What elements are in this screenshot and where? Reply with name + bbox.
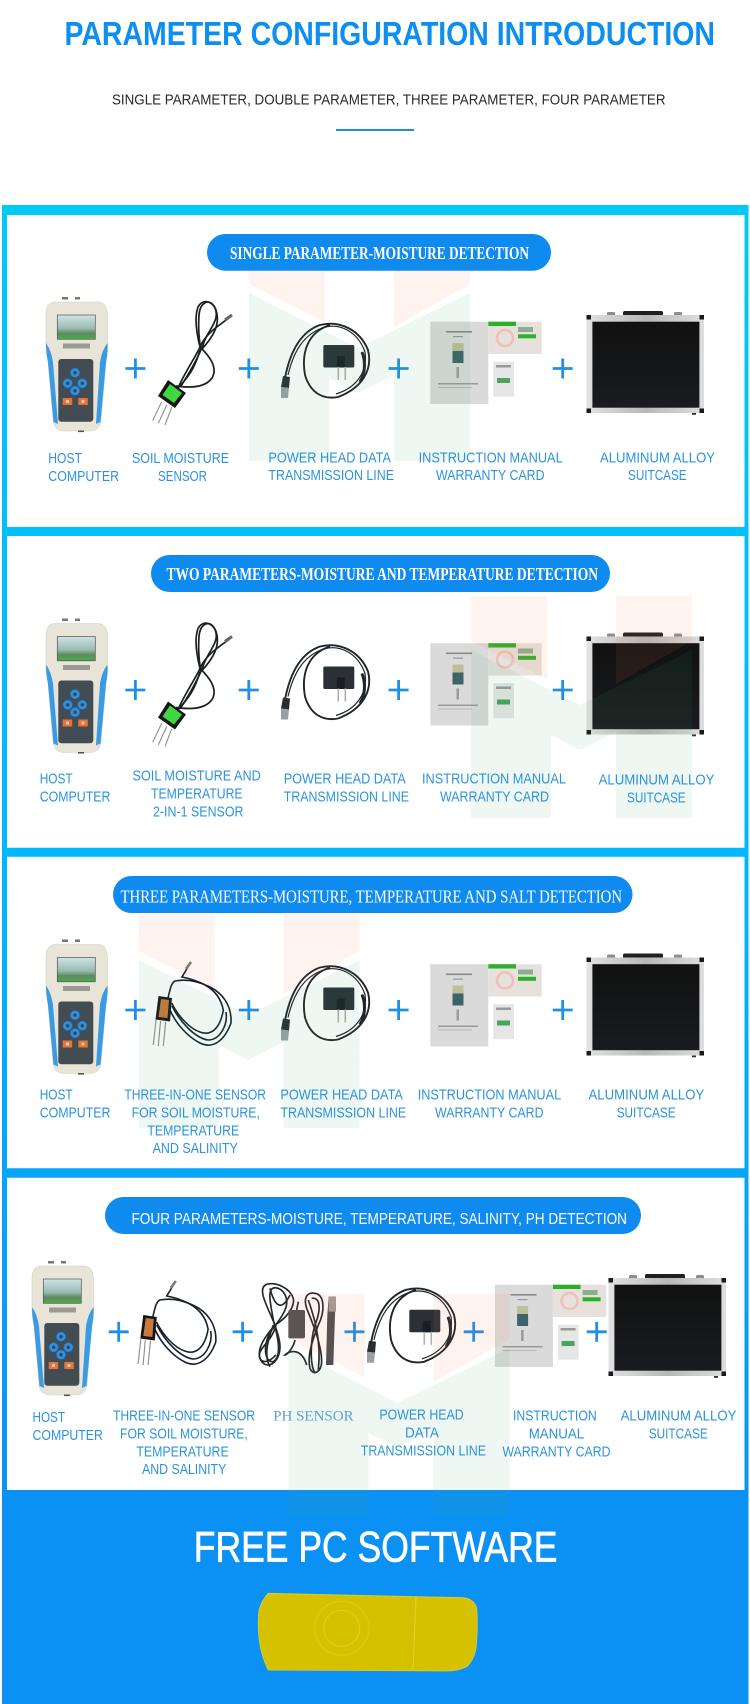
label: host computer xyxy=(32,1409,103,1444)
label: host computer: HOST xyxy=(40,770,73,787)
label: manual and warranty: INSTRUCTION MANUAL xyxy=(418,1086,561,1103)
host computer xyxy=(46,297,108,432)
power head data line xyxy=(281,645,369,720)
label: manual and warranty: WARRANTY CARD xyxy=(440,788,549,805)
panel: two parameters xyxy=(40,555,714,820)
watermark logo xyxy=(471,596,692,818)
label: suitcase xyxy=(599,771,714,806)
label: manual and warranty: INSTRUCTION xyxy=(513,1407,597,1424)
plus sign xyxy=(239,358,259,378)
label: host computer: HOST xyxy=(32,1409,65,1426)
label: host computer: COMPUTER xyxy=(32,1427,103,1444)
label: suitcase xyxy=(600,450,715,484)
label: three-in-one sensor xyxy=(113,1407,255,1478)
manual and warranty card xyxy=(430,322,542,404)
footer heading: FREE PC SOFTWARE xyxy=(194,1524,557,1572)
panel: three parameters xyxy=(40,876,704,1157)
label: three-in-one sensor: FOR SOIL MOISTURE, xyxy=(120,1425,248,1442)
panel: single parameter xyxy=(46,234,715,485)
label: suitcase: ALUMINUM ALLOY xyxy=(599,771,714,788)
icon: yellow USB drive xyxy=(258,1593,477,1671)
label: soil moisture sensor: SOIL MOISTURE xyxy=(132,450,229,467)
label: three-in-one sensor: FOR SOIL MOISTURE, xyxy=(132,1104,260,1121)
label: manual and warranty xyxy=(502,1407,611,1460)
label: three-in-one sensor: AND SALINITY xyxy=(142,1461,226,1478)
three-in-one sensor xyxy=(138,1281,216,1365)
aluminum suitcase xyxy=(586,954,704,1057)
label: three-in-one sensor xyxy=(124,1086,266,1157)
power head data line xyxy=(281,324,369,398)
label: suitcase: ALUMINUM ALLOY xyxy=(621,1407,736,1424)
label: suitcase: SUITCASE xyxy=(628,467,687,484)
power head data line xyxy=(281,966,369,1040)
label: host computer: COMPUTER xyxy=(40,788,111,805)
label: manual and warranty xyxy=(418,1086,561,1121)
heading pill: THREE PARAMETERS-MOISTURE, TEMPERATURE AND SALT DETECTION xyxy=(120,887,622,907)
host computer xyxy=(32,1261,94,1396)
label: three-in-one sensor: TEMPERATURE xyxy=(147,1122,239,1139)
manual and warranty card xyxy=(495,1285,606,1367)
heading pill xyxy=(113,876,632,913)
label: power head data line: TRANSMISSION LINE xyxy=(284,788,409,805)
label: power head data line xyxy=(284,770,409,805)
label: power head data line xyxy=(280,1086,406,1121)
plus sign xyxy=(553,680,573,700)
label: power head data line xyxy=(361,1407,486,1459)
plus sign xyxy=(389,358,409,378)
label: suitcase: SUITCASE xyxy=(617,1104,676,1121)
aluminum suitcase xyxy=(608,1274,726,1378)
plus sign xyxy=(553,358,573,378)
label: power head data line: TRANSMISSION LINE xyxy=(361,1442,486,1459)
label: 2-in-1 sensor: SOIL MOISTURE AND xyxy=(132,767,261,784)
label: soil moisture sensor: SENSOR xyxy=(158,468,207,485)
plus sign xyxy=(125,1000,145,1020)
label: pH sensor: PH SENSOR xyxy=(273,1408,354,1424)
label: manual and warranty xyxy=(419,450,563,484)
label: manual and warranty xyxy=(422,770,566,805)
host computer xyxy=(46,618,108,754)
label: three-in-one sensor: TEMPERATURE xyxy=(136,1443,229,1460)
label: 2-in-1 sensor: TEMPERATURE xyxy=(151,785,243,802)
plus sign xyxy=(464,1322,484,1342)
pH sensor xyxy=(259,1284,336,1373)
watermark logo xyxy=(288,1294,510,1516)
subtitle: SINGLE PARAMETER, DOUBLE PARAMETER, THREE PARAMETER, FOUR PARAMETER xyxy=(112,92,666,109)
label: host computer: HOST xyxy=(40,1086,73,1103)
heading pill xyxy=(151,555,610,592)
heading pill: SINGLE PARAMETER-MOISTURE DETECTION xyxy=(230,243,529,263)
aluminum suitcase xyxy=(586,311,704,415)
label: three-in-one sensor: THREE-IN-ONE SENSOR xyxy=(124,1086,266,1103)
plus sign xyxy=(389,1000,409,1020)
plus sign xyxy=(233,1322,253,1342)
host computer xyxy=(46,940,108,1075)
three-in-one sensor xyxy=(153,962,231,1046)
label: host computer: HOST xyxy=(48,450,82,467)
label: manual and warranty: WARRANTY CARD xyxy=(435,1104,544,1121)
label: host computer: COMPUTER xyxy=(48,468,119,485)
watermark logo xyxy=(249,239,470,461)
label: host computer xyxy=(40,1086,111,1121)
label: host computer: COMPUTER xyxy=(40,1104,111,1121)
label: soil moisture sensor xyxy=(132,450,229,485)
label: host computer xyxy=(40,770,111,805)
label: power head data line: POWER HEAD DATA xyxy=(280,1086,403,1103)
label: manual and warranty: INSTRUCTION MANUAL xyxy=(422,770,566,787)
label: power head data line: POWER HEAD DATA xyxy=(268,450,391,466)
plus sign xyxy=(109,1322,129,1342)
label: three-in-one sensor: AND SALINITY xyxy=(153,1140,238,1157)
plus sign xyxy=(553,1000,573,1020)
heading pill xyxy=(207,234,551,271)
heading pill: TWO PARAMETERS-MOISTURE AND TEMPERATURE DETECTION xyxy=(166,564,598,584)
label: manual and warranty: WARRANTY CARD xyxy=(436,467,545,484)
panel: four parameters xyxy=(32,1197,736,1516)
label: suitcase: SUITCASE xyxy=(649,1425,708,1442)
label: 2-in-1 sensor xyxy=(132,767,261,820)
heading pill: FOUR PARAMETERS-MOISTURE, TEMPERATURE, SALINITY, PH DETECTION xyxy=(132,1211,627,1228)
label: manual and warranty: WARRANTY CARD xyxy=(502,1443,611,1460)
label: host computer xyxy=(48,450,119,485)
label: suitcase xyxy=(588,1086,704,1121)
manual and warranty card xyxy=(430,964,542,1046)
label: power head data line: DATA xyxy=(405,1424,439,1441)
label: suitcase xyxy=(621,1407,736,1442)
plus sign xyxy=(125,358,145,378)
heading pill xyxy=(105,1197,641,1234)
label: suitcase: ALUMINUM ALLOY xyxy=(588,1086,704,1103)
label: manual and warranty: INSTRUCTION MANUAL xyxy=(419,450,563,466)
soil moisture and temperature sensor xyxy=(153,623,232,746)
label: power head data line: TRANSMISSION LINE xyxy=(268,467,394,484)
manual and warranty card xyxy=(430,643,542,726)
label: power head data line: POWER HEAD DATA xyxy=(284,770,406,787)
power head data line xyxy=(367,1289,455,1363)
label: manual and warranty: MANUAL xyxy=(529,1425,584,1442)
plus sign xyxy=(239,680,259,700)
plus sign xyxy=(389,680,409,700)
plus sign xyxy=(239,1000,259,1020)
label: power head data line: TRANSMISSION LINE xyxy=(280,1104,406,1121)
watermark logo xyxy=(139,906,360,1128)
label: power head data line xyxy=(268,450,394,484)
plus sign xyxy=(587,1322,607,1342)
plus sign xyxy=(344,1322,364,1342)
plus sign xyxy=(125,680,145,700)
label: three-in-one sensor: THREE-IN-ONE SENSOR xyxy=(113,1407,255,1424)
soil moisture sensor xyxy=(153,302,232,425)
footer panel background xyxy=(2,1490,748,1704)
label: suitcase: ALUMINUM ALLOY xyxy=(600,450,715,466)
label: 2-in-1 sensor: 2-IN-1 SENSOR xyxy=(153,803,244,820)
label: power head data line: POWER HEAD xyxy=(379,1407,464,1424)
label: suitcase: SUITCASE xyxy=(627,789,686,806)
panel frame xyxy=(2,205,748,1490)
aluminum suitcase xyxy=(586,632,704,736)
